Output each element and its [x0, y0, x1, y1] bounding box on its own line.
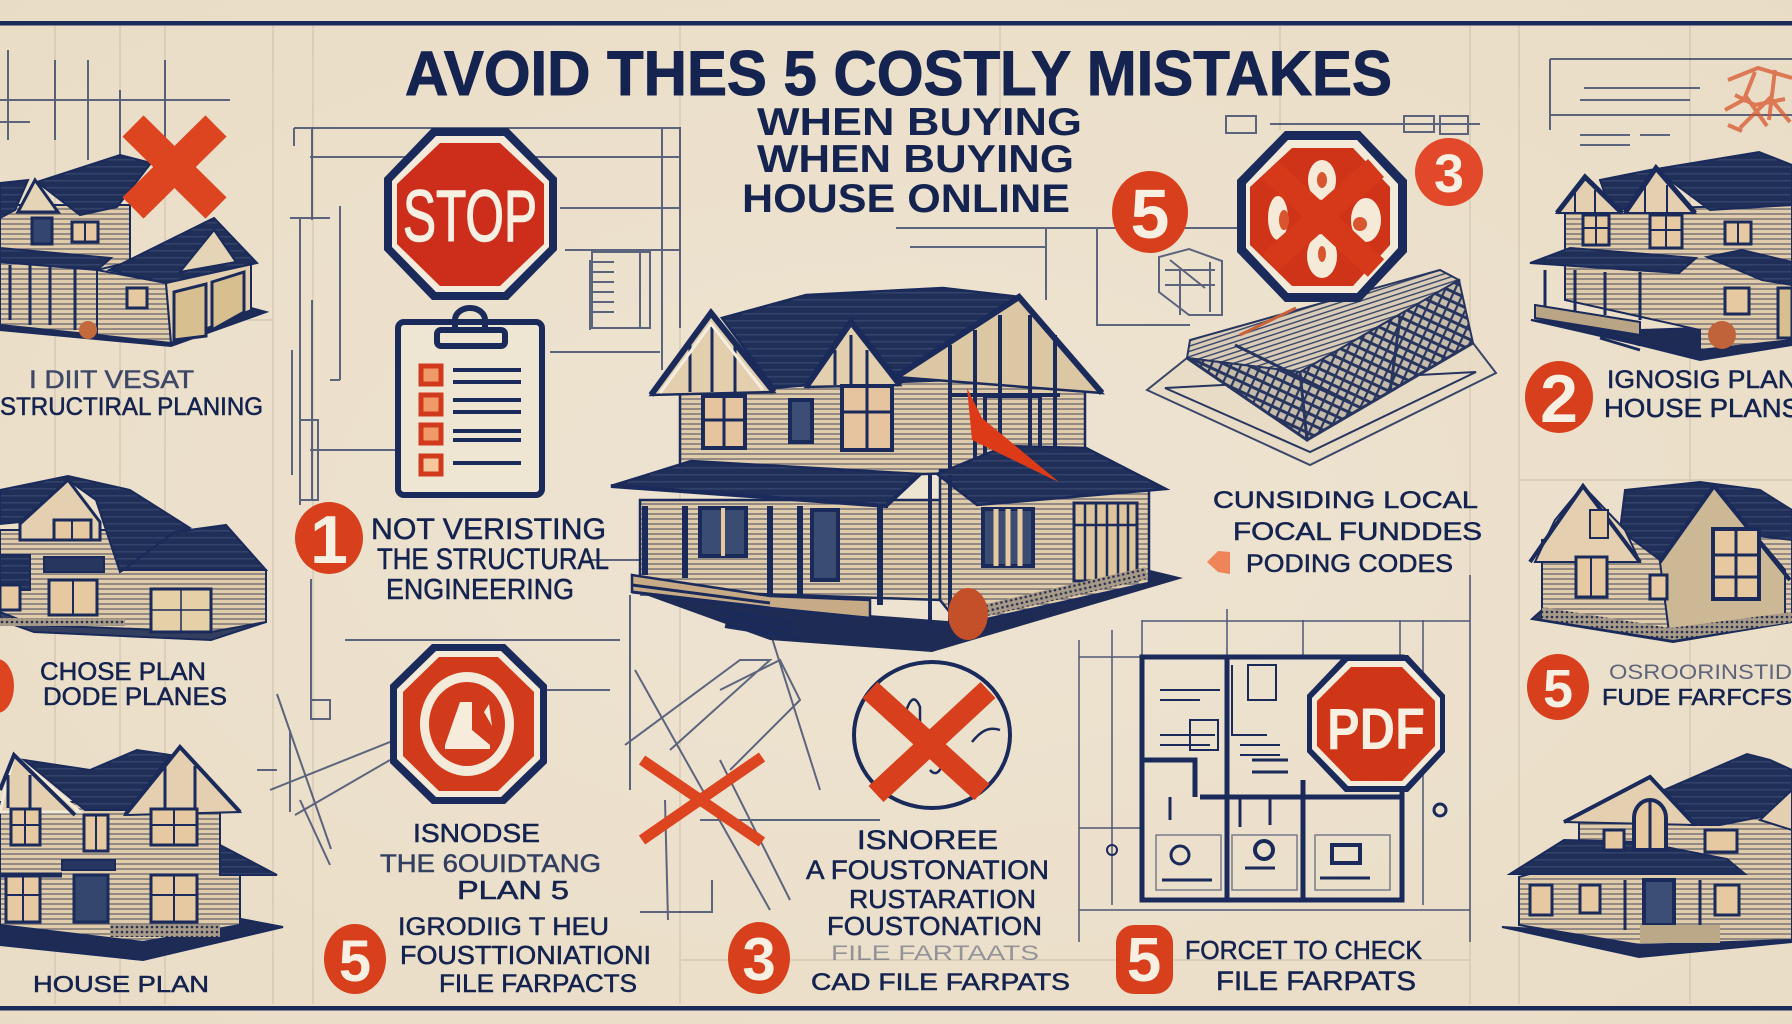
subtitle line 1: WHEN BUYING — [757, 101, 1082, 144]
orange marker — [1207, 551, 1230, 574]
house frame / truss drawing — [1147, 270, 1496, 465]
mistake 1 text: ENGINEERING — [386, 574, 574, 606]
mistake text: top left: STRUCTIRAL PLANING — [0, 393, 263, 421]
number badge: 3 bottom — [728, 922, 790, 994]
main house illustration — [611, 288, 1183, 652]
upper walls — [680, 380, 1085, 480]
house illustration: top left — [0, 155, 266, 346]
mistake text: top left: I DIIT VESAT — [29, 366, 194, 394]
subtitle line 3: HOUSE ONLINE — [742, 177, 1070, 221]
top border rule — [0, 21, 1792, 26]
mistake text: left middle: CHOSE PLAN — [40, 658, 206, 686]
number badge: 5 right — [1527, 654, 1589, 720]
mistake text: right middle: OSROORINSTID — [1609, 661, 1792, 684]
floor plan — [1079, 575, 1470, 942]
title — [405, 39, 1392, 221]
mistake text: top left — [0, 366, 263, 421]
mistake text: bottom left — [398, 913, 651, 998]
bottom border rule — [0, 1006, 1792, 1010]
pdf stop sign — [1307, 655, 1445, 792]
number badge: 3 top: 3 — [1434, 144, 1464, 204]
mistake text: bottom left: FOUSTTIONIATIONI — [400, 940, 651, 970]
stop sign: STOP — [403, 177, 537, 257]
number badge: 5 floor plan — [1116, 925, 1173, 995]
mistake 5 text — [1185, 935, 1423, 996]
checklist row 4 — [421, 456, 521, 474]
number badge: 5 top — [1112, 171, 1188, 253]
crossed-out stop sign — [1237, 131, 1407, 302]
mistake text: centre column — [806, 825, 1070, 996]
mistake text: bottom left: IGRODIIG T HEU — [398, 913, 609, 941]
back roof — [722, 288, 1020, 388]
porch roof — [611, 461, 920, 506]
mistake 2 text — [1604, 366, 1792, 423]
checklist row 3 — [421, 425, 521, 443]
mistake 1 text — [371, 513, 609, 606]
mistake 1 text: THE STRUCTURAL — [377, 543, 609, 576]
house illustration: right middle — [1530, 482, 1792, 642]
number badge: 2: 2 — [1540, 361, 1578, 437]
pdf stop sign: PDF — [1327, 697, 1425, 762]
icon: red slash on main house — [967, 388, 1059, 482]
checklist row 2 — [421, 395, 521, 414]
ground shadow — [632, 570, 1183, 652]
mistake 2 text: IGNOSIG PLAN — [1607, 366, 1792, 394]
icon: red x on diagonal drawing — [642, 757, 762, 842]
house illustration: left bottom — [0, 747, 283, 960]
icon: clipboard checklist — [398, 308, 542, 495]
number badge: 5 bottom: 5 — [339, 929, 371, 994]
number badge: 3 bottom: 3 — [742, 926, 776, 993]
house illustration: top right — [1530, 152, 1792, 360]
upper windows — [703, 396, 745, 448]
title: AVOID THES 5 COSTLY MISTAKES — [405, 39, 1392, 109]
bush — [948, 588, 988, 640]
mistake text: consulting local codes — [1213, 487, 1482, 578]
lower windows — [983, 509, 1033, 566]
number badge: 1: 1 — [310, 502, 348, 578]
house illustration: bottom right — [1502, 754, 1792, 957]
mistake text: centre-left column — [380, 818, 601, 905]
caption: house plan: HOUSE PLAN — [33, 971, 209, 997]
mistake text: centre column: ISNOREE — [857, 825, 998, 855]
number badge: 5 bottom — [324, 924, 386, 994]
house illustration: left middle — [0, 476, 266, 640]
mistake text: centre-left column: THE 6OUIDTANG — [380, 850, 601, 878]
lower walls — [640, 500, 940, 600]
stop sign — [384, 128, 557, 300]
right gable — [896, 297, 1102, 393]
mistake text: centre column: A FOUSTONATION — [806, 855, 1049, 885]
mistake text: centre-left column: PLAN 5 — [457, 875, 569, 905]
mistake text: centre column: RUSTARATION — [849, 884, 1036, 914]
mistake text: right middle — [1602, 661, 1792, 710]
mistake text: centre column: FILE FARTAATS — [831, 942, 1039, 965]
mistake text: centre-left column: ISNODSE — [413, 818, 540, 848]
number badge: 5 floor plan: 5 — [1127, 926, 1161, 995]
mistake text: consulting local codes: CUNSIDING LOCAL — [1213, 487, 1478, 514]
mistake text: centre column: CAD FILE FARPATS — [811, 969, 1070, 996]
mistake 5 text: FILE FARPATS — [1216, 966, 1416, 996]
red sketch marks top right — [1725, 68, 1792, 131]
mistake text: left middle: DODE PLANES — [43, 683, 227, 711]
mistake 1 text: NOT VERISTING — [371, 513, 606, 546]
number badge: 3 top — [1415, 138, 1483, 206]
mistake text: left middle — [40, 658, 227, 711]
number badge: 2 — [1525, 361, 1593, 437]
mistake text: centre column: FOUSTONATION — [827, 911, 1042, 941]
mistake text: bottom left: FILE FARPACTS — [439, 970, 637, 998]
porch posts — [645, 506, 880, 605]
number badge: left edge — [0, 659, 14, 713]
mistake text: consulting local codes: FOCAL FUNDDES — [1233, 518, 1482, 546]
porch floor and steps — [632, 575, 870, 618]
subtitle line 2: WHEN BUYING — [757, 138, 1074, 181]
icon: crossed-out circle — [854, 662, 1010, 808]
checklist row 1 — [421, 366, 521, 384]
mistake 2 text: HOUSE PLANS — [1604, 393, 1792, 423]
blurred numerals — [1268, 160, 1381, 278]
number badge: 1 — [295, 502, 363, 578]
mistake text: consulting local codes: PODING CODES — [1246, 550, 1453, 578]
number badge: 5 right: 5 — [1543, 659, 1573, 719]
icon: big red x over house — [133, 126, 216, 208]
right lower roof — [937, 446, 1166, 505]
stop sign with circle — [390, 644, 547, 804]
mistake 5 text: FORCET TO CHECK — [1185, 935, 1423, 965]
left gables — [651, 313, 774, 395]
number badge: 5 top: 5 — [1131, 175, 1169, 253]
mistake text: right middle: FUDE FARFCFS — [1602, 684, 1792, 710]
